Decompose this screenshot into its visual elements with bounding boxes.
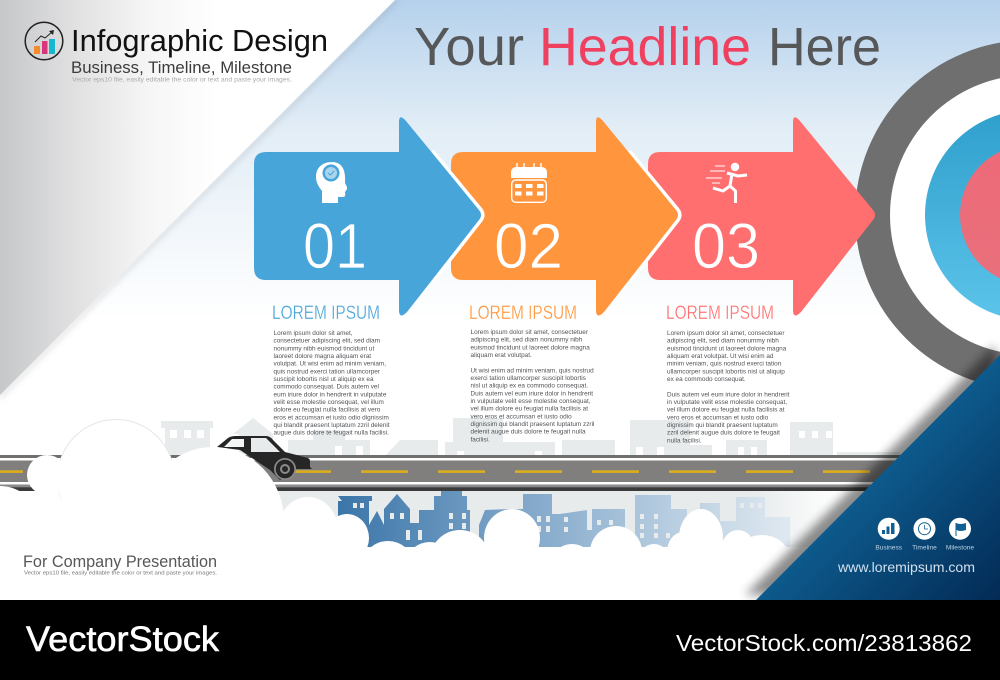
paragraph 3: vero eros et accumsan et iusto odio xyxy=(667,414,769,421)
paragraph 1: dolore eu feugiat nulla facilisis at vero xyxy=(274,407,381,414)
panel: headline: Here xyxy=(768,17,881,77)
panel: headline: Headline xyxy=(539,17,751,77)
paragraph 1: velit esse molestie consequat, vel illum xyxy=(274,399,384,406)
paragraph 1: laoreet dolore magna aliquam erat xyxy=(274,353,371,360)
icon: milestone: Milestone xyxy=(946,544,974,552)
paragraph 3: Lorem ipsum dolor sit amet, consectetuer xyxy=(667,330,785,337)
heading 2: LOREM IPSUM xyxy=(469,302,577,324)
number 01: 01 xyxy=(303,210,367,282)
footer logo: VectorStock xyxy=(26,620,220,659)
paragraph 2: Duis autem vel eum iriure dolor in hendrerit xyxy=(470,390,593,397)
clouds xyxy=(0,420,840,600)
paragraph 2: exerci tation ullamcorper suscipit lobortis xyxy=(470,375,586,382)
icon: car xyxy=(217,436,312,480)
paragraph 3: aliquam erat volutpat. Ut wisi enim ad xyxy=(667,353,774,360)
paragraph 2: vel illum dolore eu feugiat nulla facilisis at xyxy=(470,406,588,413)
paragraph 2: facilisi. xyxy=(470,436,490,443)
upper skyline xyxy=(161,418,900,456)
paragraph 3: adipiscing elit, sed diam nonummy nibh xyxy=(667,338,779,345)
subtitle: Business, Timeline, Milestone xyxy=(71,58,292,77)
paragraph 3: minim veniam, quis nostrud exerci tation xyxy=(667,361,782,368)
paragraph 3: dignissim qui blandit praesent luptatum xyxy=(667,422,778,429)
paragraph 1: augue duis dolore te feugait nulla facilisi. xyxy=(274,430,389,437)
paragraph 3: in vulputate velit esse molestie consequat, xyxy=(667,399,787,406)
paragraph 1: consectetuer adipiscing elit, sed diam xyxy=(274,338,380,345)
icon: timeline: Timeline xyxy=(912,544,937,552)
arrow 2 xyxy=(451,117,678,316)
paragraph 1: commodo consequat. Duis autem vel xyxy=(274,384,379,391)
panel: column 3 text xyxy=(666,302,790,444)
paragraph 3: zzril delenit augue duis dolore te feugait xyxy=(667,430,780,437)
footer band xyxy=(0,600,1000,680)
paragraph 1: volutpat. Ut wisi enim ad minim veniam, xyxy=(274,361,386,368)
paragraph 1: nonummy nibh euismod tincidunt ut xyxy=(274,345,374,352)
paragraph 2: adipiscing elit, sed diam nonummy nibh xyxy=(470,337,583,344)
lower skyline backdrop xyxy=(278,491,838,551)
panel: headline xyxy=(414,17,881,77)
icon: calendar xyxy=(511,163,547,202)
paragraph 2: Ut wisi enim ad minim veniam, quis nostrud xyxy=(470,367,594,374)
heading 1: LOREM IPSUM xyxy=(272,302,380,324)
icon: milestone xyxy=(946,518,974,552)
paragraph 1: eum iriure dolor in hendrerit in vulputate xyxy=(274,391,387,398)
number 03: 03 xyxy=(692,210,760,282)
icon: business: Business xyxy=(875,544,903,552)
paragraph 3: ullamcorper suscipit lobortis nisl ut aliquip xyxy=(667,368,785,375)
paragraph 2: nisl ut aliquip ex ea commodo consequat. xyxy=(470,383,588,390)
paragraph 1: eros et accumsan et iusto odio dignissim xyxy=(274,414,389,421)
paragraph 3: vel illum dolore eu feugiat nulla facilisis at xyxy=(667,407,785,414)
paragraph 1: quis nostrud exerci tation ullamcorper xyxy=(274,368,381,375)
blue city skyline xyxy=(338,491,790,550)
website url: www.loremipsum.com xyxy=(837,559,975,575)
panel: top-left grey corner xyxy=(0,0,400,400)
panel: headline: Your xyxy=(414,17,524,77)
panel: navy corner xyxy=(745,345,1000,600)
paragraph 2: dignissim qui blandit praesent luptatum zzril xyxy=(470,421,594,428)
road xyxy=(0,455,920,491)
paragraph 1: Lorem ipsum dolor sit amet, xyxy=(274,330,353,337)
paragraph 3: Duis autem vel eum iriure dolor in hendrerit xyxy=(667,391,790,398)
sky background xyxy=(0,0,1000,320)
paragraph 2: Lorem ipsum dolor sit amet, consectetuer xyxy=(470,329,589,336)
paragraph 2: delenit augue duis dolore te feugait nulla xyxy=(470,429,586,436)
company presentation note: Vector eps10 file, easily editable the color or text and paste your images. xyxy=(24,570,217,576)
paragraph 3: nulla facilisi. xyxy=(667,437,702,444)
icon: logo chart xyxy=(25,22,63,60)
footer reference: VectorStock.com/23813862 xyxy=(676,630,972,656)
panel: column 2 text xyxy=(469,302,594,443)
arrow 3 xyxy=(648,117,875,316)
arrow 1 xyxy=(254,117,481,316)
paragraph 2: euismod tincidunt ut laoreet dolore magna xyxy=(470,344,590,351)
panel: column 1 text xyxy=(272,302,390,437)
paragraph 2: aliquam erat volutpat. xyxy=(470,352,532,359)
icon: head with clock xyxy=(316,162,347,203)
paragraph 3: euismod tincidunt ut laoreet dolore magna xyxy=(667,345,787,352)
icon: timeline xyxy=(912,518,937,552)
paragraph 3: ex ea commodo consequat. xyxy=(667,376,746,383)
company presentation heading: For Company Presentation xyxy=(23,552,217,571)
icon: runner xyxy=(706,163,747,203)
icon: business xyxy=(875,518,903,552)
tagline: Vector eps10 file, easily editable the color or text and paste your images. xyxy=(72,78,292,84)
paragraph 1: qui blandit praesent luptatum zzril delenit xyxy=(274,422,390,429)
heading 3: LOREM IPSUM xyxy=(666,302,774,324)
paragraph 2: in vulputate velit esse molestie consequat, xyxy=(470,398,591,405)
title: Infographic Design xyxy=(71,23,328,58)
paragraph 2: vero eros et accumsan et iusto odio xyxy=(470,413,572,420)
number 02: 02 xyxy=(494,210,563,282)
target graphic xyxy=(855,40,1000,390)
paragraph 1: suscipit lobortis nisl ut aliquip ex ea xyxy=(274,376,374,383)
